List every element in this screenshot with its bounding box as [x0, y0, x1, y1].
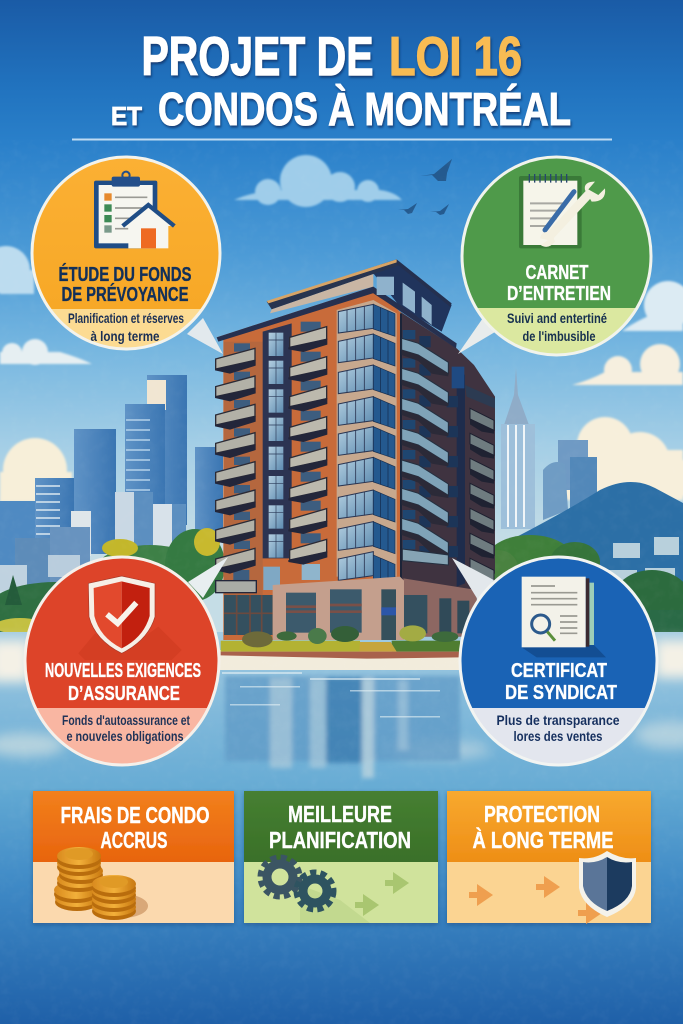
sky background — [0, 0, 683, 680]
panel: nouvelles exigences d'assurance — [20, 557, 230, 768]
landscaping — [221, 625, 460, 659]
corner bands — [337, 300, 397, 577]
title: PROJET DE — [142, 25, 374, 87]
shore — [210, 650, 470, 670]
main facade — [217, 287, 402, 640]
subtext — [507, 310, 607, 344]
right facade windows — [403, 330, 464, 557]
title: LOI 16 — [389, 25, 522, 87]
building reflection — [225, 676, 460, 778]
heading: CARNET — [526, 262, 588, 284]
clouds: side — [0, 246, 683, 502]
birds — [398, 159, 452, 215]
title — [111, 25, 571, 135]
trees — [0, 528, 683, 642]
right wing — [400, 312, 495, 637]
subtext: Planification et réserves — [68, 310, 184, 326]
icon: coin stacks — [54, 847, 148, 920]
title underline — [72, 138, 612, 140]
card: frais de condo accrus — [33, 791, 234, 923]
heading — [45, 660, 201, 705]
heading: DE PRÉVOYANCE — [62, 283, 188, 306]
title: ET — [111, 101, 142, 131]
right balconies — [402, 338, 448, 565]
tail: green callout — [458, 315, 495, 354]
label: FRAIS DE CONDO — [60, 802, 210, 828]
bottom background — [0, 790, 683, 1024]
card: protection à long terme — [447, 791, 651, 924]
panel: carnet d'entretien — [450, 157, 660, 358]
subtext: Fonds d'autoassurance et — [62, 712, 190, 728]
tail: red callout — [188, 557, 228, 598]
heading: D’ENTRETIEN — [507, 283, 611, 305]
arrows — [355, 872, 409, 916]
heading: ÉTUDE DU FONDS — [58, 263, 192, 286]
small windows in the strip — [269, 333, 283, 558]
cloud: top centre — [234, 155, 402, 207]
title: CONDOS À MONTRÉAL — [158, 83, 571, 135]
left balconies — [215, 348, 256, 593]
middle balconies — [288, 327, 327, 565]
arrows — [469, 876, 602, 924]
label — [269, 801, 411, 853]
corner glass — [338, 304, 395, 587]
heading — [507, 262, 611, 305]
label: PLANIFICATION — [269, 827, 411, 853]
subtext: Plus de transparance — [496, 712, 620, 728]
icon: gears — [261, 858, 370, 923]
icon: document with magnifier — [522, 577, 606, 657]
subtext: de l'imbusible — [522, 328, 596, 344]
skyline right — [501, 368, 597, 529]
building — [215, 259, 495, 659]
subtext — [62, 712, 190, 744]
label: À LONG TERME — [472, 826, 614, 853]
icon: shield with check — [78, 576, 182, 660]
subtext: Suivi and entertiné — [507, 310, 607, 326]
icon: notebook and wrench — [519, 174, 605, 248]
mountain — [495, 482, 683, 610]
tail: orange callout — [187, 318, 223, 354]
ground floor — [224, 577, 477, 640]
water ripples — [222, 672, 440, 718]
tail: blue callout — [452, 558, 494, 600]
subtext — [496, 712, 620, 744]
far-right balconies — [470, 408, 494, 584]
balcony windows — [233, 322, 321, 590]
shore highlights — [0, 640, 683, 760]
heading — [58, 263, 192, 306]
icon: shield — [579, 851, 636, 917]
penthouse windows — [377, 277, 432, 325]
card: meilleure planification — [244, 791, 438, 923]
penthouse — [373, 261, 452, 332]
icon: clipboard and house — [94, 172, 174, 248]
subtext: e nouveles obligations — [66, 728, 184, 744]
heading: DE SYNDICAT — [505, 682, 617, 704]
label — [60, 802, 210, 853]
subtext — [68, 310, 184, 344]
heading — [505, 660, 617, 704]
panel: étude du fonds de prévoyance — [20, 157, 230, 354]
buildings on the mountain — [607, 537, 679, 586]
label — [472, 801, 614, 853]
heading: CERTIFICAT — [511, 660, 607, 682]
label: ACCRUS — [100, 827, 168, 853]
label: PROTECTION — [484, 801, 600, 827]
subtext: lores des ventes — [514, 728, 603, 744]
skyline left — [0, 375, 223, 593]
heading: D’ASSURANCE — [68, 683, 180, 705]
subtext: à long terme — [90, 328, 160, 344]
water — [0, 632, 683, 802]
heading: NOUVELLES EXIGENCES — [45, 660, 201, 682]
label: MEILLEURE — [288, 801, 392, 827]
panel: certificat de syndicat — [450, 557, 665, 768]
